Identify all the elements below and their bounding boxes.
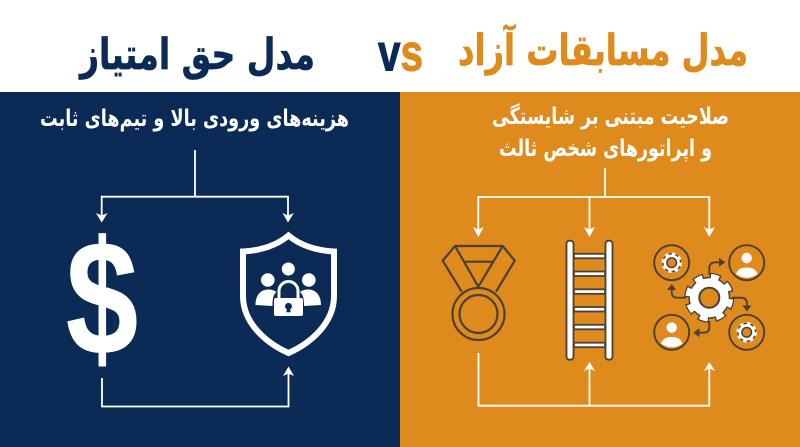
- arrows: competition top connector: [473, 168, 715, 237]
- text: competition subtitle: و اپراتورهای شخص ثالث: [499, 136, 712, 162]
- icon: central gear with people and gears network: [654, 245, 764, 350]
- icon: network arrows: [667, 258, 752, 337]
- icon: bottom right gear badge: [729, 315, 764, 350]
- text: competition subtitle: [492, 103, 729, 162]
- panel: open competition model: [400, 92, 800, 447]
- icon: dollar sign: $: [66, 208, 138, 389]
- icon: top left gear badge: [654, 245, 689, 280]
- text: franchise subtitle: هزینه‌های ورودی بالا و تیم‌های ثابت: [40, 106, 349, 132]
- arrow: franchise bottom connector: [102, 366, 294, 406]
- text: competition subtitle: صلاحیت مبتنی بر شایستگی: [492, 103, 729, 130]
- heading: versus: vs: [378, 24, 423, 82]
- icon: central gear: [688, 277, 730, 319]
- panel: franchise model: [0, 92, 400, 447]
- icon: bottom left person badge: [654, 315, 689, 350]
- icon: medal: [443, 246, 515, 340]
- icon: shield with team and lock: [243, 236, 334, 353]
- icon: ladder: [566, 241, 612, 360]
- arrows: competition bottom connector: [478, 353, 715, 406]
- icon: top right person badge: [729, 245, 764, 280]
- arrows: franchise top connector: [96, 150, 294, 222]
- heading: franchise model: مدل حق امتیاز: [78, 30, 315, 80]
